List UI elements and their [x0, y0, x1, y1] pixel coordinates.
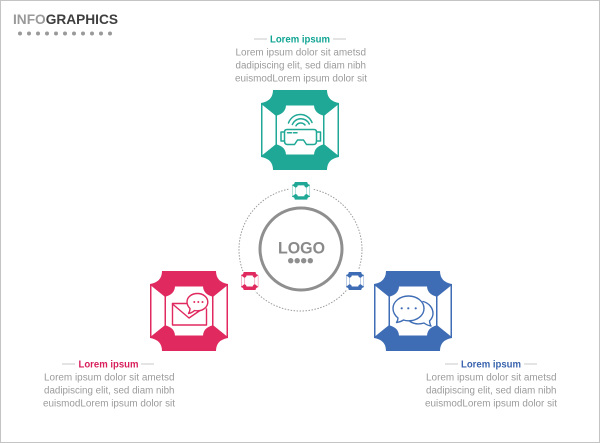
panel: pink envelope [150, 271, 228, 351]
title [13, 12, 118, 36]
icon: envelope with speech bubble [172, 294, 208, 325]
icon: two speech bubbles [393, 296, 433, 326]
logo circle [260, 208, 342, 290]
icon: VR headset with wifi [281, 115, 320, 144]
small connector: teal [289, 178, 313, 202]
logo circle: LOGO [278, 238, 325, 258]
title: INFOGRAPHICS [13, 12, 118, 27]
text block: right blue: Lorem ipsum [461, 358, 521, 370]
text block: top teal: Lorem ipsum [270, 34, 330, 46]
panel: blue speech bubbles [374, 271, 452, 351]
text block: right blue: dadipiscing elit, sed diam nibh [426, 386, 556, 396]
text block: left pink [43, 358, 175, 410]
text block: right blue: Lorem ipsum dolor sit ametsd [426, 372, 556, 384]
dotted ring [239, 188, 362, 311]
panel: teal VR headset [261, 90, 339, 170]
small connector: pink [238, 269, 262, 293]
text block: top teal: euismodLorem ipsum dolor sit [235, 74, 367, 84]
text block: left pink: Lorem ipsum [78, 358, 138, 370]
text block: top teal [235, 34, 367, 84]
text block: top teal: Lorem ipsum dolor sit ametsd [236, 48, 366, 58]
text block: left pink: dadipiscing elit, sed diam nibh [44, 386, 174, 396]
text block: left pink: Lorem ipsum dolor sit ametsd [44, 372, 174, 384]
text block: top teal: dadipiscing elit, sed diam nibh [236, 60, 366, 72]
text block: right blue [425, 358, 557, 410]
small connector: blue [343, 269, 367, 293]
text block: right blue: euismodLorem ipsum dolor sit [425, 398, 557, 410]
text block: left pink: euismodLorem ipsum dolor sit [43, 398, 175, 410]
